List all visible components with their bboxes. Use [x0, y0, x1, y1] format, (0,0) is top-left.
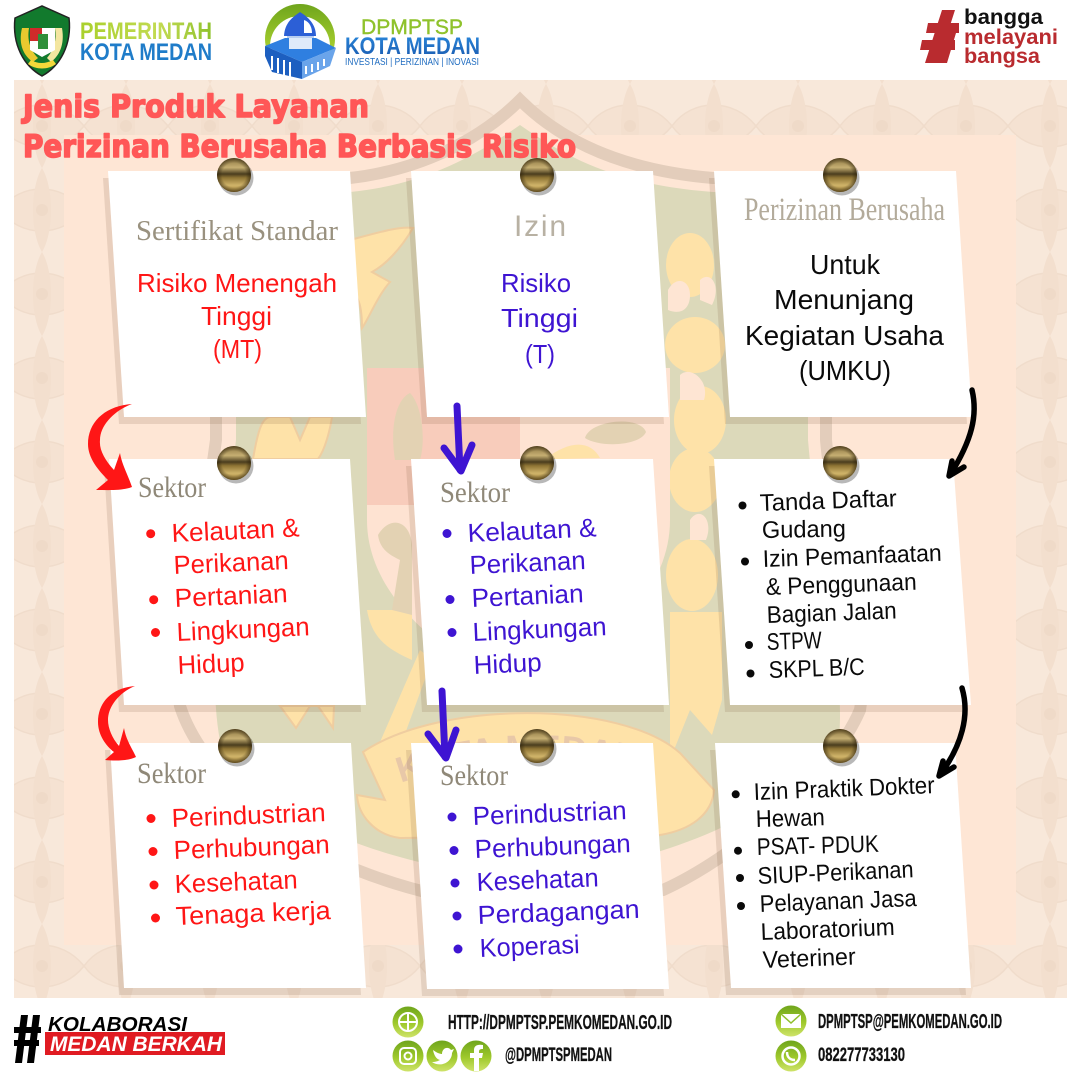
icon: globe: [392, 1006, 424, 1038]
sector list: Perindustrian: [472, 795, 627, 831]
sector list: [448, 795, 640, 963]
risk label: Tinggi: [201, 301, 272, 331]
label on red bar: MEDAN BERKAH: [50, 1033, 223, 1056]
faded emblem watermark: KOTA MEDAN: [396, 736, 622, 782]
footer campaign: Kolaborasi Medan Berkah: [14, 1014, 225, 1063]
sector list: Lingkungan: [472, 611, 607, 647]
heading: Perizinan Berusaha: [744, 192, 945, 228]
panel: Sertifikat Standar: [103, 158, 366, 424]
icon: mail: [776, 1006, 806, 1036]
icon: instagram: [392, 1040, 424, 1072]
sector list: Perikanan: [173, 545, 289, 580]
icon: whatsapp: [776, 1040, 806, 1072]
sector list: [146, 797, 332, 931]
permit list: Tanda Daftar: [759, 485, 897, 517]
sector list: Pertanian: [174, 578, 288, 613]
sector list: Perdagangan: [477, 894, 640, 930]
sector list: Hidup: [473, 647, 542, 680]
title: [21, 89, 576, 165]
sector list: Tenaga kerja: [175, 895, 332, 931]
UMKU label: Untuk: [810, 249, 881, 280]
heading: Sektor: [440, 759, 508, 792]
tagline: bangsa: [964, 45, 1040, 68]
UMKU label: [745, 249, 944, 386]
heading: Sektor: [440, 476, 510, 509]
permit list: [732, 772, 935, 974]
UMKU label: (UMKU): [799, 355, 891, 386]
panel: Sektor T row 2: [406, 446, 669, 712]
panel: Sektor T row 3: [406, 729, 669, 996]
permit list: & Penggunaan: [765, 569, 917, 601]
logo text: KOTA MEDAN: [345, 33, 480, 60]
icon: facebook: [460, 1040, 492, 1072]
logo text: PEMERINTAH: [80, 18, 212, 45]
permit list: STPW: [766, 627, 822, 656]
UMKU label: Kegiatan Usaha: [745, 320, 944, 351]
permit list: Pelayanan Jasa: [759, 885, 918, 918]
title: Perizinan Berusaha Berbasis Risiko: [23, 129, 576, 165]
panel: Sektor MT row 3: [105, 729, 366, 995]
heading: Sektor: [137, 757, 206, 790]
permit list: Veteriner: [762, 943, 856, 974]
panel: UMKU list row 2: [709, 446, 971, 712]
logo text: [80, 18, 212, 66]
risk label: Risiko: [501, 268, 571, 298]
label: KOLABORASI: [48, 1014, 187, 1036]
panel: Perizinan Berusaha: [709, 158, 972, 424]
tagline: [964, 6, 1058, 68]
logo: Pemerintah Kota Medan: [15, 6, 212, 76]
risk label: (MT): [213, 334, 262, 364]
permit list: Laboratorium: [760, 914, 895, 946]
sector list: [442, 512, 607, 680]
risk label: Tinggi: [501, 303, 578, 333]
risk label: Risiko Menengah: [137, 268, 337, 298]
phone contact: [776, 1040, 905, 1072]
arrow: black bottom: [939, 688, 965, 776]
arrow: red top: [88, 404, 132, 490]
risk label: [137, 268, 337, 364]
social media contact: @DPMPTSPMEDAN: [505, 1045, 612, 1066]
logo text: INVESTASI | PERIZINAN | INOVASI: [345, 57, 479, 68]
faded emblem watermark: [174, 92, 867, 897]
permit list: SKPL B/C: [768, 654, 865, 684]
arrow: black top: [949, 390, 974, 476]
arrow: blue top: [444, 406, 472, 471]
panel: UMKU list row 3: [710, 729, 971, 995]
website contact: [392, 1006, 672, 1038]
sector list: Perhubungan: [173, 829, 330, 865]
UMKU label: Menunjang: [774, 284, 914, 315]
heading: Izin: [514, 210, 566, 243]
permit list: Izin Pemanfaatan: [762, 540, 942, 573]
title: Jenis Produk Layanan: [21, 89, 369, 125]
sector list: Kesehatan: [174, 864, 298, 899]
sector list: Lingkungan: [176, 611, 310, 647]
email contact: [776, 1006, 1002, 1036]
panel: Izin: [406, 158, 669, 424]
logo: bangga melayani bangsa: [920, 6, 1058, 68]
logo text: KOTA MEDAN: [80, 39, 212, 66]
social media contact: [392, 1040, 612, 1072]
logo text: DPMPTSP: [361, 16, 463, 39]
sector list: Koperasi: [479, 929, 580, 963]
icon: hash: [14, 1015, 41, 1063]
arrow: red bottom: [98, 686, 136, 761]
tagline: melayani: [964, 26, 1058, 49]
permit list: Bagian Jalan: [766, 597, 897, 629]
sector list: Perindustrian: [171, 797, 326, 833]
icon: city shield: [15, 6, 69, 76]
icon: domed building: [265, 4, 336, 79]
risk label: (T): [525, 339, 555, 369]
logo text: [345, 16, 480, 68]
sector list: Kesehatan: [476, 862, 599, 897]
sector list: Perikanan: [469, 545, 586, 580]
heading: Sertifikat Standar: [136, 215, 338, 247]
permit list: [738, 485, 942, 684]
sector list: Kelautan &: [467, 512, 597, 548]
permit list: Izin Praktik Dokter: [753, 772, 935, 806]
permit list: SIUP-Perikanan: [757, 856, 914, 890]
permit list: PSAT- PDUK: [756, 831, 879, 861]
icon: twitter: [426, 1040, 458, 1072]
sector list: Perhubungan: [474, 828, 631, 864]
tagline: bangga: [964, 6, 1043, 29]
heading: Sektor: [138, 471, 206, 504]
website contact: HTTP://DPMPTSP.PEMKOMEDAN.GO.ID: [448, 1012, 672, 1034]
permit list: Gudang: [762, 516, 846, 544]
risk label: [501, 268, 578, 369]
phone contact: 082277733130: [818, 1045, 905, 1066]
sector list: Kelautan &: [171, 512, 300, 548]
sector list: [146, 512, 310, 680]
sector list: Hidup: [177, 647, 245, 680]
arrow: blue bottom: [428, 691, 456, 758]
sector list: Pertanian: [471, 578, 584, 613]
permit list: Hewan: [755, 804, 825, 833]
panel: Sektor MT row 2: [104, 446, 366, 712]
logo: DPMPTSP Kota Medan: [265, 4, 480, 79]
icon: hash: [920, 10, 959, 63]
